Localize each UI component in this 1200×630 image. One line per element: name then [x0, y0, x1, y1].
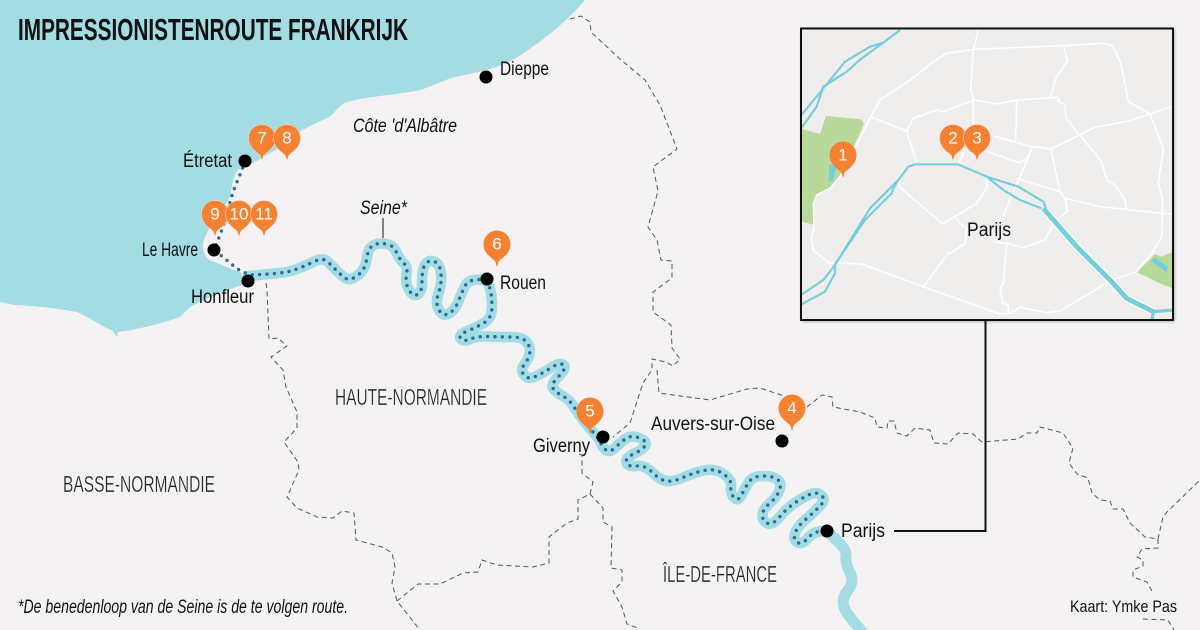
- pin 3: 3: [972, 128, 982, 148]
- streets: [812, 30, 1172, 314]
- sea: [0, 0, 585, 337]
- pin 4: 4: [787, 398, 797, 418]
- pin 2: [940, 124, 966, 161]
- city dots: [208, 70, 834, 538]
- region label Haute-Normandie: HAUTE-NORMANDIE: [335, 384, 487, 410]
- inset map content: [800, 30, 1173, 322]
- label Honfleur: Honfleur: [191, 287, 255, 308]
- pin 9: [202, 200, 228, 237]
- label Cote d'Albatre: Côte 'd'Albâtre: [353, 116, 457, 137]
- title: IMPRESSIONISTENROUTE FRANKRIJK: [18, 13, 408, 47]
- pin 8: [274, 124, 300, 161]
- pin 1: 1: [838, 146, 848, 164]
- pin 10: [226, 200, 252, 237]
- pin 7: [248, 124, 276, 161]
- region label Ile-de-France: ÎLE-DE-FRANCE: [662, 561, 777, 587]
- pin 11: [250, 200, 278, 237]
- label Dieppe: Dieppe: [500, 59, 549, 80]
- label Le Havre: Le Havre: [142, 240, 198, 261]
- label Etretat: Étretat: [183, 151, 233, 172]
- pin 9: 9: [210, 204, 220, 224]
- pin 6: [484, 230, 510, 267]
- inset label Parijs: Parijs: [967, 220, 1011, 241]
- pin 3: [964, 124, 990, 161]
- pin 5: 5: [585, 402, 595, 420]
- pin 1: [830, 142, 856, 178]
- inset map: Parijs: [800, 28, 1173, 322]
- label Seine: Seine*: [360, 198, 407, 219]
- label Auvers-sur-Oise: Auvers-sur-Oise: [651, 414, 775, 435]
- pin 7: 7: [257, 128, 267, 148]
- inset frame background: [801, 28, 1173, 320]
- parks: [800, 116, 1173, 289]
- river Seine: [214, 161, 864, 630]
- pin 10: 10: [230, 204, 248, 224]
- region borders: [266, 16, 1200, 630]
- pin 4: [778, 394, 806, 431]
- pin 11: 11: [255, 204, 273, 224]
- pin 8: 8: [282, 128, 292, 148]
- river in Paris: [800, 30, 1173, 322]
- label Parijs: Parijs: [841, 521, 885, 542]
- pin 5: [576, 398, 604, 434]
- pin 2: 2: [948, 128, 958, 148]
- connector line Parijs to inset: [894, 320, 986, 531]
- label Rouen: Rouen: [500, 273, 546, 294]
- pin 6: 6: [492, 234, 502, 254]
- ponds: [829, 164, 1168, 272]
- credit: Kaart: Ymke Pas: [1070, 597, 1177, 616]
- label Seine: [360, 198, 407, 238]
- label Giverny: Giverny: [533, 436, 590, 457]
- inset frame: [801, 28, 1173, 320]
- footnote: *De benedenloop van de Seine is de te volgen route.: [18, 597, 348, 618]
- region label Basse-Normandie: BASSE-NORMANDIE: [63, 471, 215, 497]
